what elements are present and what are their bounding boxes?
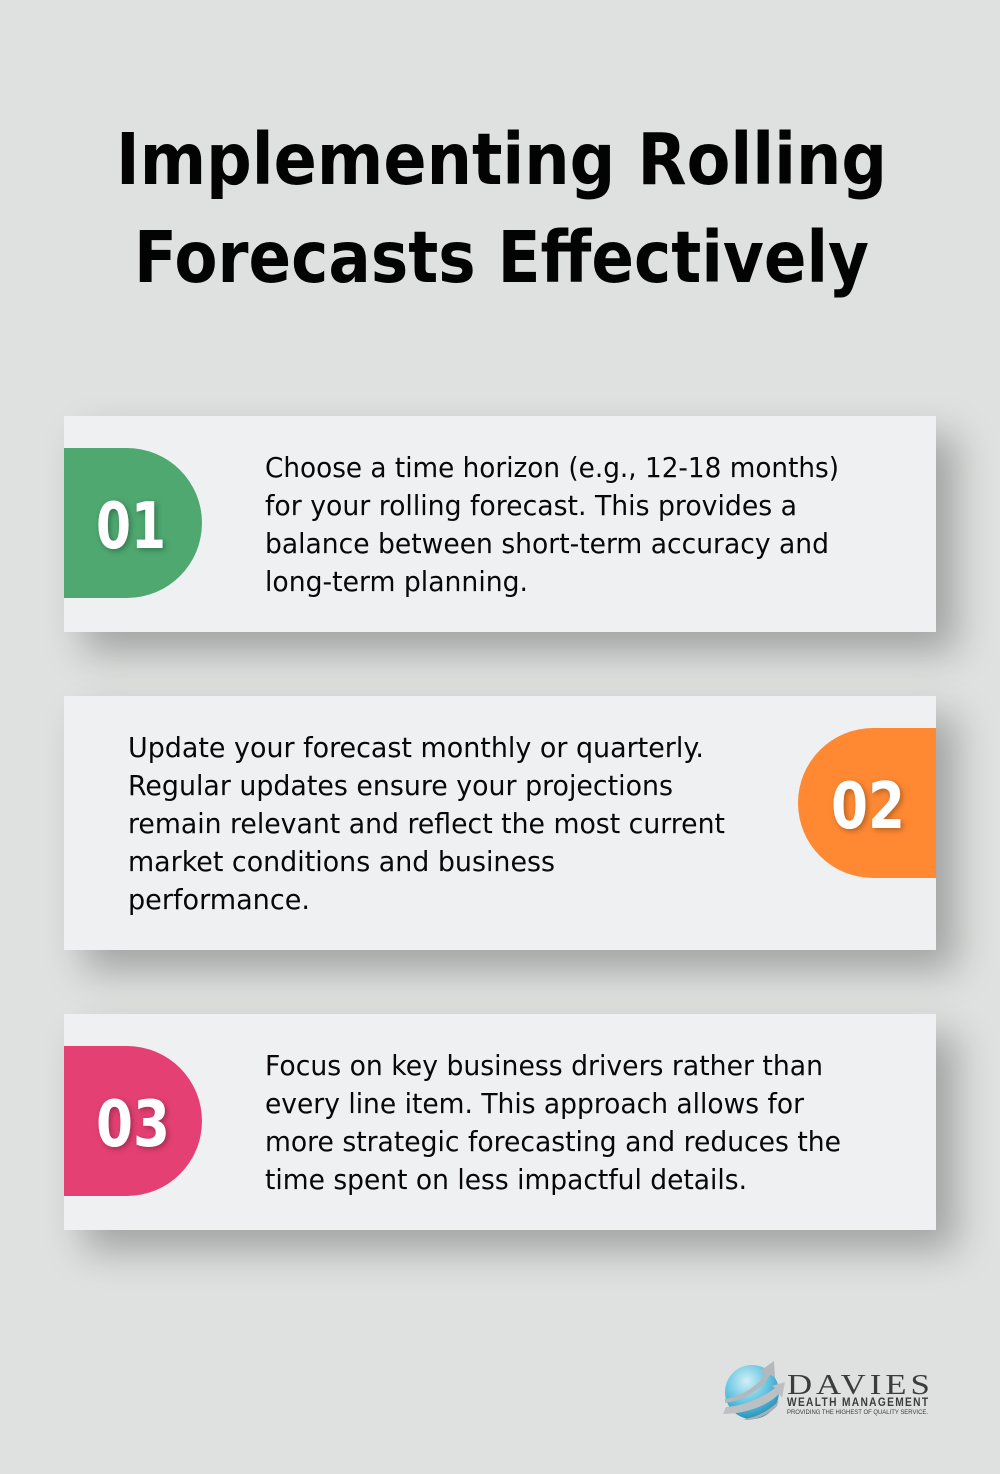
title [116, 118, 887, 299]
number 03: 03 [96, 1088, 170, 1162]
text: step 1 description [265, 451, 839, 598]
text: step 2 description: remain relevant and reflect the most current [128, 807, 725, 840]
text: step 2 description: performance. [128, 883, 310, 916]
logo wordmark [787, 1368, 930, 1416]
logo: Davies Wealth Management [723, 1361, 930, 1420]
badge: 01 [64, 448, 202, 598]
number 02: 02 [831, 770, 905, 844]
logo wordmark: PROVIDING THE HIGHEST OF QUALITY SERVICE. [787, 1409, 928, 1416]
badge: 03 [64, 1046, 202, 1196]
text: step 1 description: Choose a time horizon (e.g., 12-18 months) [265, 451, 839, 484]
badge: 02 [798, 728, 936, 878]
logo wordmark: WEALTH MANAGEMENT [787, 1396, 928, 1409]
text: step 2 description: Regular updates ensure your projections [128, 769, 673, 802]
number 01: 01 [96, 490, 166, 564]
panel: step 1 [64, 416, 936, 632]
panel: step 3 [64, 1014, 936, 1230]
text: step 3 description: time spent on less impactful details. [265, 1163, 747, 1196]
icon: globe with arrows [723, 1361, 785, 1420]
text: step 3 description: every line item. This approach allows for [265, 1087, 804, 1120]
text: step 3 description: Focus on key business drivers rather than [265, 1049, 823, 1082]
text: step 3 description: more strategic forecasting and reduces the [265, 1125, 841, 1158]
text: step 1 description: balance between short-term accuracy and [265, 527, 829, 560]
title: Forecasts Effectively [134, 216, 869, 299]
panel: step 2 [64, 696, 936, 950]
title: Implementing Rolling [116, 118, 887, 201]
text: step 2 description: Update your forecast monthly or quarterly. [128, 731, 704, 764]
text: step 2 description [128, 731, 725, 916]
text: step 1 description: long-term planning. [265, 565, 528, 598]
text: step 1 description: for your rolling forecast. This provides a [265, 489, 797, 522]
logo wordmark: DAVIES [787, 1368, 930, 1400]
text: step 2 description: market conditions and business [128, 845, 555, 878]
text: step 3 description [265, 1049, 841, 1196]
